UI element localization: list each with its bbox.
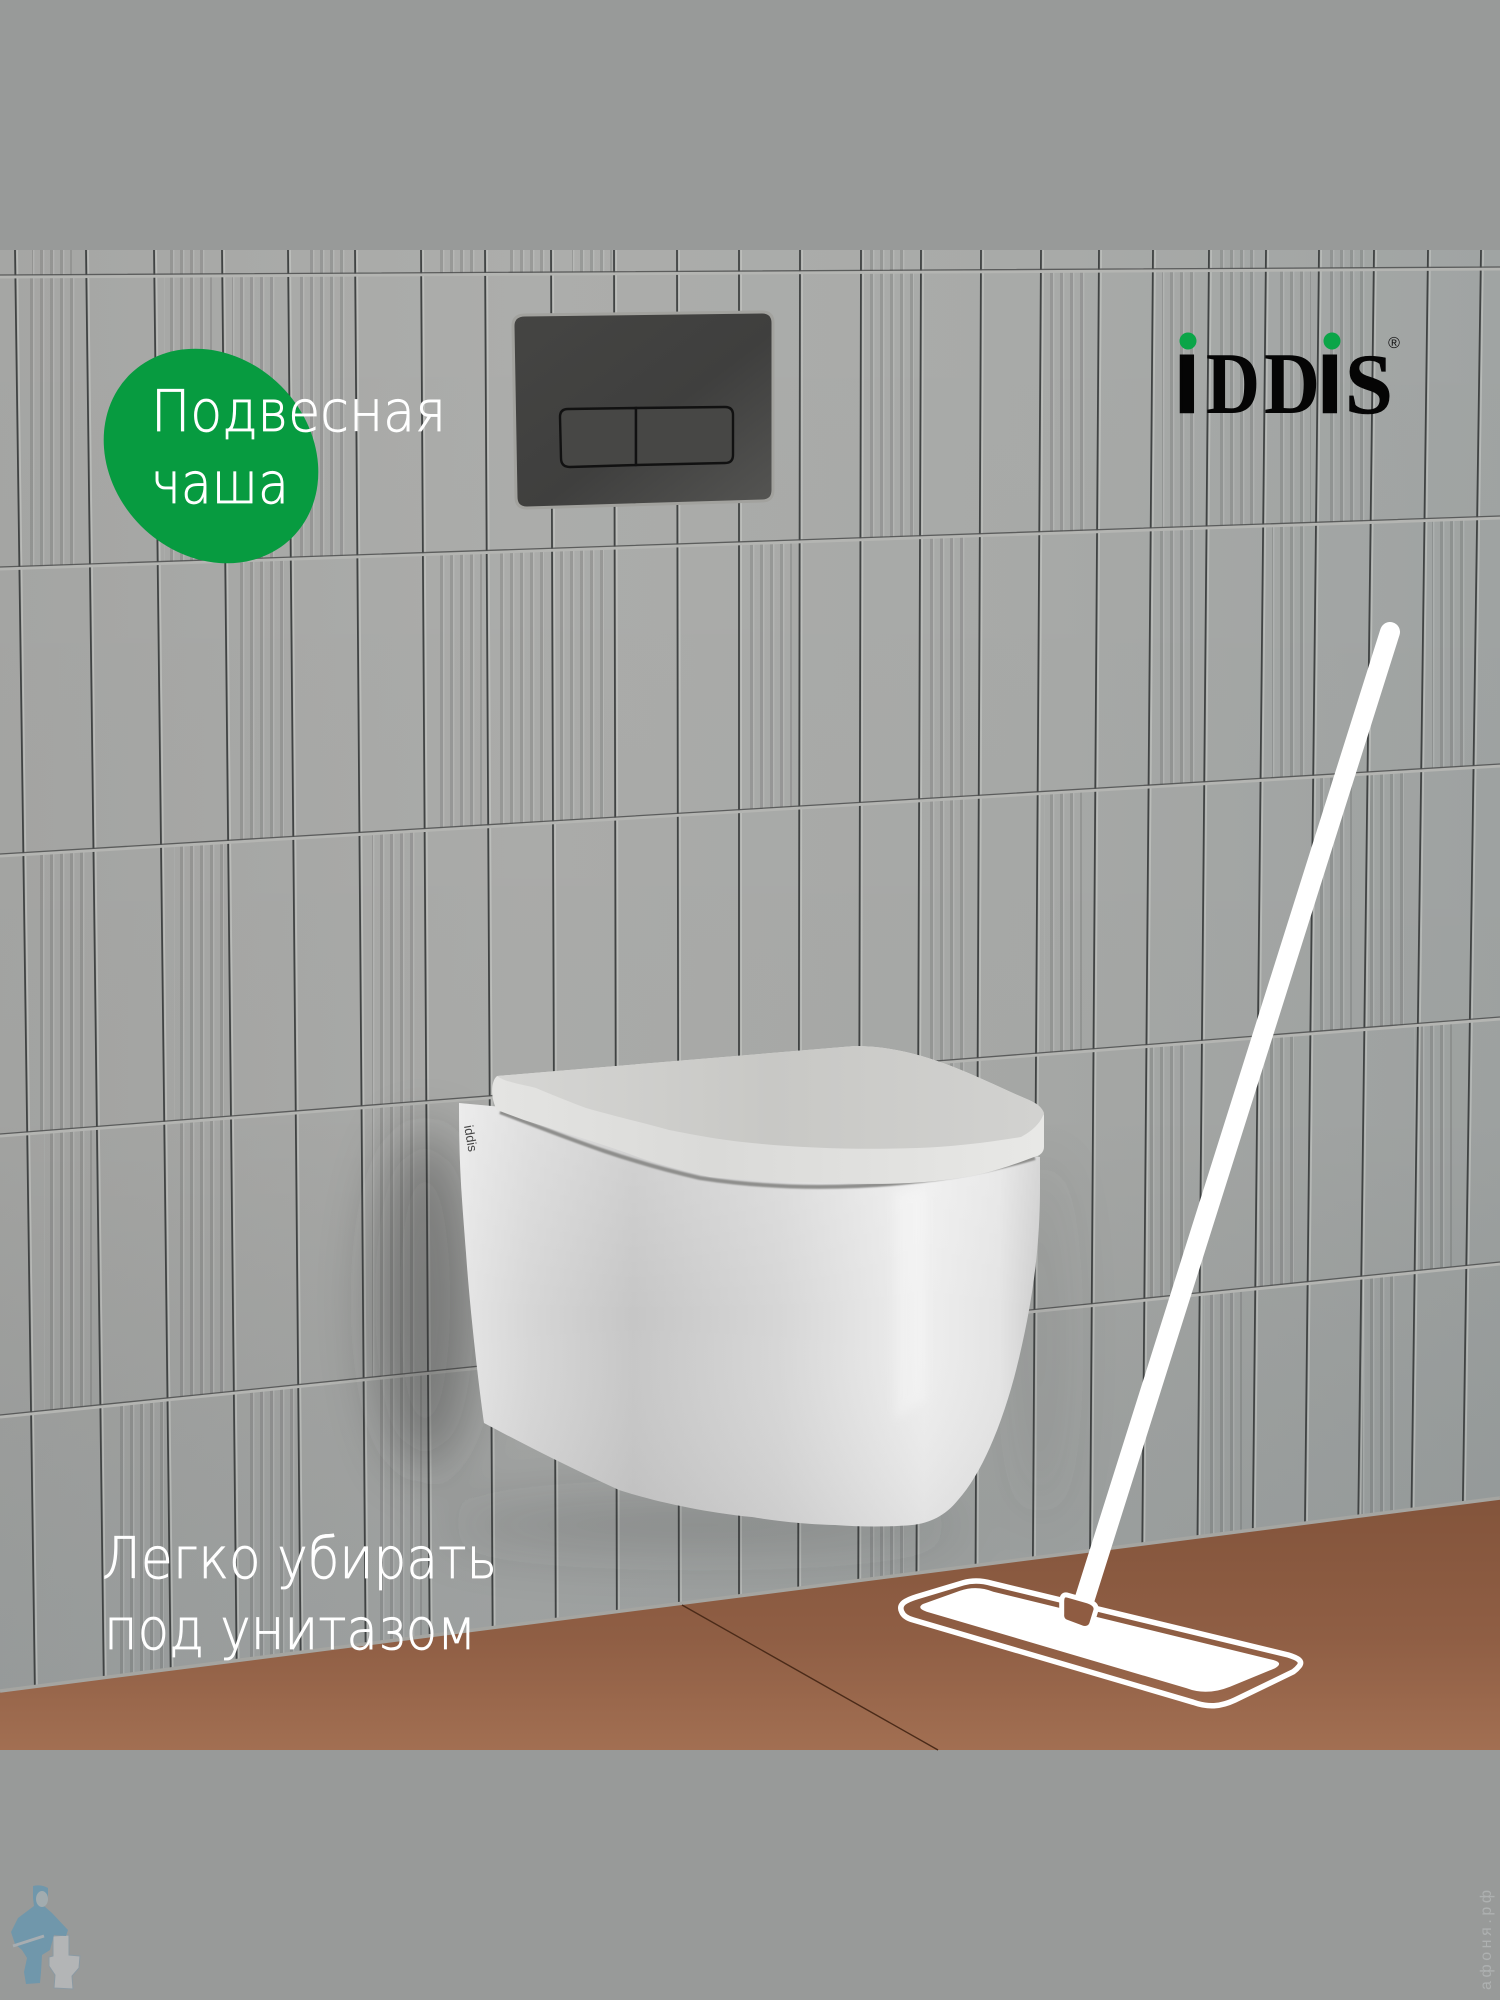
mascot wrench (13, 1936, 44, 1946)
wall shadow behind toilet (375, 1130, 1066, 1553)
flush buttons (560, 407, 733, 467)
flush plate (513, 312, 773, 508)
IDDIS logo: D (1264, 334, 1320, 432)
mop head pad (920, 1588, 1279, 1692)
badge text: hanging bowl: Подвесная (151, 379, 446, 445)
caption: easy to clean under the toilet: Легко убирать (102, 1526, 497, 1592)
brand mark on bowl: iddis (461, 1124, 481, 1153)
logo green dots (1180, 332, 1340, 350)
tiled wall (0, 250, 1500, 1700)
caption: easy to clean under the toilet: под унитазом (104, 1597, 476, 1663)
toilet bowl (459, 1103, 1040, 1526)
mascot face (36, 1891, 48, 1907)
registered mark: ® (1388, 335, 1400, 352)
IDDIS logo: I (1318, 339, 1341, 430)
toilet lid (492, 1046, 1044, 1184)
IDDIS logo: S (1345, 336, 1393, 432)
badge text: hanging bowl: чаша (151, 451, 289, 517)
mop head outer outline (901, 1581, 1301, 1706)
IDDIS logo: D (1206, 334, 1260, 432)
wall-hung toilet (459, 1046, 1044, 1526)
mop icon (901, 632, 1390, 1706)
mascot toilet (49, 1935, 80, 1989)
floor (0, 1497, 1500, 1750)
IDDIS logo (1176, 332, 1400, 432)
mascot figure (11, 1885, 68, 1984)
watermark: site name: афоня.рф (1478, 1890, 1495, 1990)
seat gap shadow (500, 1112, 1035, 1187)
watermark: plumber mascot (11, 1885, 80, 1989)
mop connector (1062, 1595, 1096, 1628)
mop handle (1085, 632, 1390, 1598)
green blob badge (60, 305, 464, 607)
bowl highlight (895, 1190, 925, 1420)
IDDIS logo: I (1176, 339, 1198, 430)
